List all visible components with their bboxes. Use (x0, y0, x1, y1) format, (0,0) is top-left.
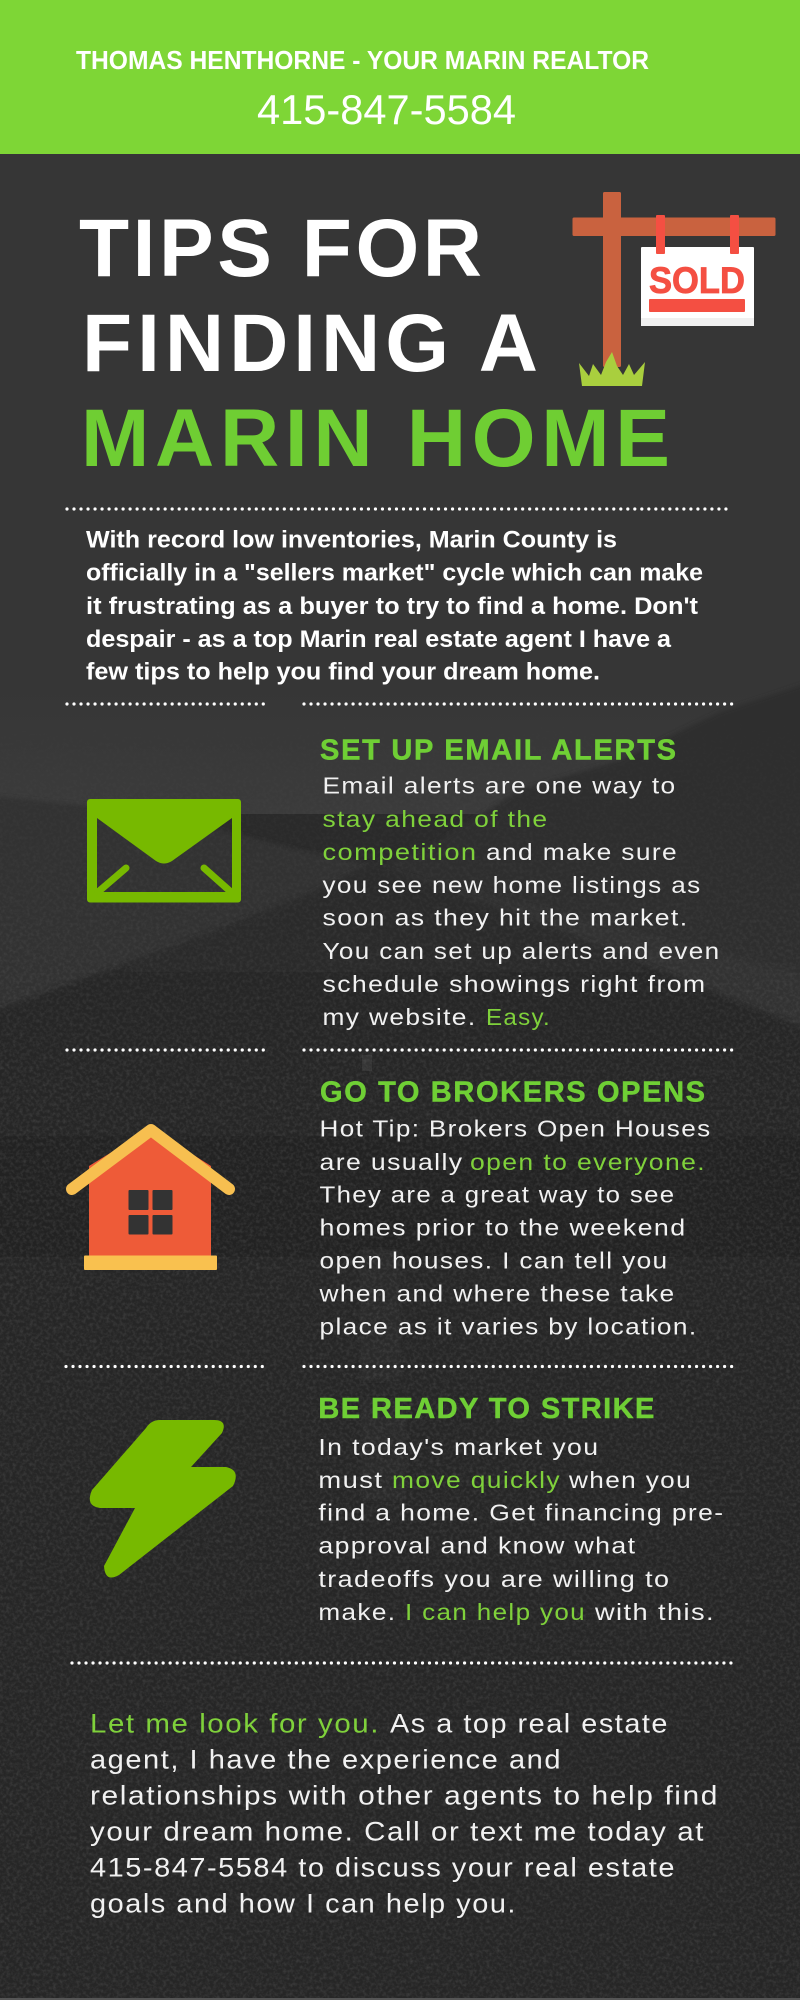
tip 3 body: In today's market you (318, 1434, 599, 1460)
tip 2 heading: GO TO BROKERS OPENS (320, 1077, 705, 1109)
closing paragraph: your dream home. Call or text me today at (90, 1817, 705, 1847)
closing paragraph: As a top real estate (390, 1709, 669, 1739)
closing paragraph (90, 1709, 719, 1919)
dividers: above tip 3 (66, 1365, 733, 1368)
tip 1 body: soon as they hit the market. (322, 905, 688, 931)
intro paragraph: With record low inventories, Marin County is (86, 526, 617, 554)
icon: envelope (87, 799, 241, 902)
divider: above intro (67, 507, 730, 511)
icon: sold sign (572, 192, 776, 386)
tip 3 heading: BE READY TO STRIKE (318, 1393, 654, 1425)
tip 3 body: with this. (594, 1599, 715, 1625)
title: MARIN HOME (81, 393, 670, 484)
tip 3 body: tradeoffs you are willing to (318, 1566, 670, 1592)
tip 3 body: approval and know what (318, 1533, 636, 1559)
tip 1 body: stay ahead of the (322, 806, 548, 832)
tip 1 heading: SET UP EMAIL ALERTS (320, 735, 676, 767)
tip 1 body: Email alerts are one way to (322, 773, 676, 799)
header band (0, 0, 800, 154)
title: TIPS FOR (79, 203, 482, 294)
tip 3 body: when you (568, 1467, 692, 1493)
agent name: THOMAS HENTHORNE - YOUR MARIN REALTOR (76, 45, 649, 75)
title: FINDING A (82, 298, 538, 389)
tip 3 body: make. (318, 1599, 396, 1625)
phone number: 415-847-5584 (257, 86, 516, 133)
divider: above closing (72, 1661, 737, 1665)
closing paragraph: relationships with other agents to help find (90, 1781, 719, 1811)
tip 2 body: open to everyone. (470, 1149, 706, 1175)
tip 1 body: you see new home listings as (322, 872, 702, 898)
icon: sold sign: SOLD (649, 260, 745, 301)
closing paragraph: goals and how I can help you. (90, 1889, 517, 1919)
intro paragraph (86, 526, 703, 686)
tip 3 body: I can help you (405, 1599, 586, 1625)
tip 1 body: and make sure (486, 839, 678, 865)
tip 2 body: homes prior to the weekend (320, 1215, 686, 1241)
closing paragraph: 415-847-5584 to discuss your real estate (90, 1853, 676, 1883)
closing paragraph: Let me look for you. (90, 1709, 380, 1739)
icon: lightning bolt (90, 1420, 236, 1578)
tip 2 body: place as it varies by location. (320, 1313, 698, 1339)
tip 1 body: my website. (322, 1004, 476, 1030)
tip 1 body: schedule showings right from (322, 971, 706, 997)
tip 2 body: Hot Tip: Brokers Open Houses (320, 1116, 712, 1142)
intro paragraph: it frustrating as a buyer to try to find a home. Don't (86, 593, 698, 620)
tip 3 body (318, 1434, 724, 1625)
tip 2 body: They are a great way to see (320, 1182, 676, 1208)
dividers: above tip 2 (67, 1048, 733, 1052)
tip 3 body: move quickly (392, 1467, 561, 1493)
tip 2 body: when and where these take (318, 1280, 676, 1306)
dividers: above tip 1 (67, 702, 733, 706)
tip 2 body (318, 1116, 712, 1339)
tip 2 body: are usually (320, 1149, 464, 1175)
tip 3 body: must (318, 1467, 383, 1493)
tip 2 body: open houses. I can tell you (320, 1248, 668, 1274)
tip 1 body (322, 773, 720, 1030)
tip 1 body: Easy. (486, 1004, 551, 1030)
tip 1 body: competition (322, 839, 478, 865)
intro paragraph: officially in a "sellers market" cycle which can make (86, 560, 703, 587)
title (79, 203, 670, 484)
tip 1 body: You can set up alerts and even (322, 938, 720, 964)
icon: house (72, 1128, 229, 1270)
tip 3 body: find a home. Get financing pre- (318, 1500, 724, 1526)
closing paragraph: agent, I have the experience and (90, 1745, 562, 1775)
intro paragraph: despair - as a top Marin real estate agent I have a (86, 626, 672, 653)
intro paragraph: few tips to help you find your dream home. (86, 659, 600, 686)
